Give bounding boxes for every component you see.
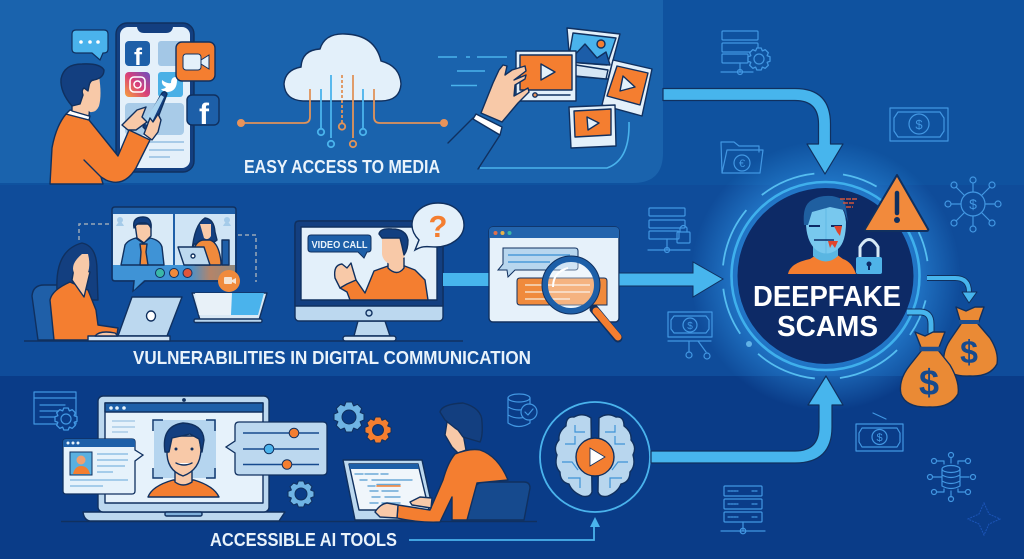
panel 3 illustration: face-swap laptop: [61, 396, 537, 522]
decorative icon: dollar bill: $: [915, 117, 923, 132]
arrows to money bags: [907, 278, 977, 333]
video card right: [602, 60, 652, 116]
icon: orange camera badge: [218, 270, 240, 292]
dashed connectors: [79, 224, 256, 282]
presenter: [335, 229, 428, 300]
question bubble: [412, 203, 464, 250]
padlock: [856, 240, 882, 274]
outer arcs: [701, 151, 950, 401]
dark disc: [738, 188, 914, 364]
arrow from AI tools to deepfake scams: [651, 376, 843, 463]
decorative icon: bill with circuit: [668, 312, 712, 359]
face scan: [148, 420, 219, 497]
panel 1 illustration: person with phone: [50, 23, 219, 184]
decorative icon: document with gear: [34, 392, 77, 430]
video call label: [308, 235, 371, 258]
warning triangle: [865, 175, 928, 231]
deepfake face: [788, 196, 857, 274]
decorative icon: bill: $: [876, 432, 883, 444]
profile window: [63, 439, 143, 494]
monitor: [295, 221, 443, 341]
question bubble: ?: [429, 209, 447, 244]
central glow: [690, 141, 960, 411]
gear small: [288, 481, 314, 507]
video call label: VIDEO CALL: [312, 240, 368, 251]
sleeve: [448, 114, 502, 169]
video call window: [112, 207, 236, 291]
decorative icon: euro folder: [721, 142, 763, 173]
inner ring: [732, 182, 920, 370]
video card bottom: [569, 105, 616, 148]
blue message bubble: [498, 248, 578, 277]
floor line: [24, 340, 463, 342]
decorative icon: euro folder: €: [739, 158, 745, 170]
phone: [116, 23, 194, 172]
icon: money bag front: $: [919, 362, 939, 403]
title: [753, 281, 901, 343]
panel 2 illustration: video meeting: [24, 207, 463, 341]
panel 2 illustration: monitor with video call: [295, 203, 464, 341]
panel title: vulnerabilities in digital communication: VULNERABILITIES IN DIGITAL COMMUNICATION: [133, 348, 531, 368]
gears: [334, 402, 391, 443]
thin connector line: [480, 122, 629, 168]
laptop: [88, 297, 182, 341]
title: DEEPFAKE: [753, 281, 901, 313]
decorative icon: dollar network: $: [969, 196, 977, 212]
laptop: [83, 396, 285, 521]
chair: [32, 285, 60, 340]
man: [375, 403, 508, 522]
icon: database check: [508, 394, 537, 426]
title: SCAMS: [777, 311, 878, 343]
magnifier: [542, 256, 618, 338]
panel title: easy access to media: EASY ACCESS TO MEDIA: [244, 157, 440, 177]
panel: easy access to media: [0, 0, 663, 183]
icon: facebook tile: f: [199, 98, 210, 131]
decorative icon: server with lock: [648, 208, 690, 252]
arrow from media to deepfake scams: [663, 88, 843, 174]
decorative icon: bill: [856, 413, 903, 451]
icon: chat bubble: [72, 30, 108, 60]
person body: [50, 64, 167, 184]
woman in call: [178, 218, 229, 265]
icon: money bag back: $: [960, 334, 978, 370]
decorative icon: dollar bill: [890, 108, 948, 141]
icon: money bag back: [944, 307, 997, 376]
phone: f: [134, 44, 143, 71]
speed lines: [438, 57, 507, 86]
slider bubble: [226, 422, 327, 475]
photo card: [567, 28, 620, 79]
connector to brain icon: [409, 517, 600, 540]
browser window with magnifier: [489, 227, 619, 338]
decorative icon: server with gear: [721, 31, 770, 74]
orange message bubble: [517, 278, 607, 305]
middle arrow segment: [443, 273, 489, 286]
icon: money bag front: [900, 332, 958, 407]
chair: [467, 482, 530, 520]
brain: [555, 415, 635, 496]
media cards with hand: [448, 28, 652, 169]
laptop: [343, 460, 435, 520]
decorative icon: dollar network: [945, 177, 1001, 232]
man in call: [121, 217, 164, 265]
icon: video camera: [176, 42, 215, 81]
arrow from communication to deepfake scams: [619, 262, 723, 297]
cloud network illustration: [237, 34, 448, 147]
small laptop: [192, 293, 267, 322]
main video card: [516, 51, 576, 101]
panel title: accessible ai tools: ACCESSIBLE AI TOOLS: [210, 530, 397, 550]
hand: [481, 65, 529, 122]
decorative icon: server: [721, 486, 765, 534]
brain video icon: [540, 402, 650, 512]
base line: [61, 520, 537, 522]
panel 3 illustration: man at laptop: [343, 403, 530, 522]
decorative icon: database network: [928, 452, 976, 502]
decorative icon: bill with circuit: $: [687, 321, 693, 332]
icon: facebook tile: [187, 95, 219, 131]
central badge: deepfake scams: [701, 151, 950, 401]
faint star mark: [968, 503, 1000, 535]
play button: [576, 438, 614, 476]
woman: [50, 243, 118, 340]
